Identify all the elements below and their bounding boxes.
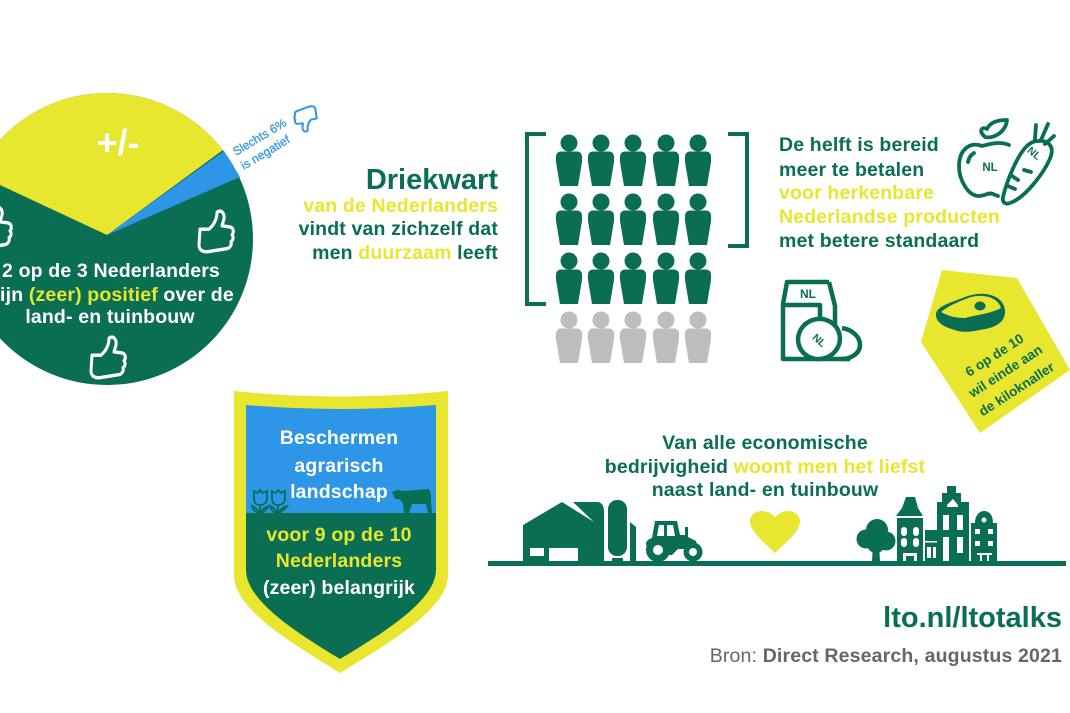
bracket left (527, 134, 546, 304)
text block: van alle economische: bedrijvigheid woont men het liefst (605, 456, 926, 478)
icon: steak (936, 294, 1005, 332)
text block: de helft: De helft is bereid (779, 134, 939, 156)
shield sky (246, 405, 436, 513)
panel: pie chart (0, 93, 320, 385)
shield text (263, 427, 415, 599)
text block: driekwart: men duurzaam leeft (312, 242, 498, 264)
icon: thumb up bottom (91, 337, 125, 378)
text block: driekwart: van de Nederlanders (303, 195, 498, 217)
text block: driekwart: Driekwart (366, 164, 498, 196)
icon: farm (523, 500, 636, 561)
shield text: landschap (290, 481, 388, 503)
pie: neutral segment (0, 93, 223, 235)
link: lto.nl/ltotalks: lto.nl/ltotalks (883, 602, 1062, 634)
text block: de helft: voor herkenbare (779, 182, 934, 204)
icon: heart (750, 511, 800, 553)
pie: positive segment (0, 93, 253, 385)
shield text: Beschermen (280, 427, 398, 449)
icon: tractor (646, 521, 702, 562)
icon: thumb up left (0, 207, 11, 248)
text block: de helft: met betere standaard (779, 230, 979, 252)
icon: apple and carrot (959, 120, 1054, 204)
tag text (963, 331, 1058, 419)
text block: van alle economische: naast land- en tuinbouw (652, 479, 879, 501)
pie: negative segment (107, 151, 240, 235)
shield field (246, 513, 436, 659)
panel: kiloknaller tag (921, 270, 1070, 433)
tag text: wil einde aan (965, 342, 1045, 401)
ground line (488, 561, 1066, 566)
icon: milk and egg: NL (810, 332, 829, 350)
tag text: 6 op de 10 (963, 331, 1027, 380)
text block: de helft (779, 134, 1000, 252)
negative label: is negatief (238, 132, 293, 173)
tag shape (921, 270, 1070, 433)
shield outer (234, 391, 448, 673)
text block: van alle economische (605, 432, 926, 501)
bracket right (728, 134, 747, 246)
icon: milk and egg: NL (800, 287, 816, 301)
icon: milk and egg (783, 282, 860, 364)
icon: tree (856, 519, 896, 561)
text block: de helft: meer te betalen (779, 159, 924, 181)
icon: cow (392, 489, 432, 513)
shield text: agrarisch (294, 455, 384, 477)
shield text: voor 9 op de 10 (266, 524, 412, 546)
icon: tulips (252, 490, 287, 513)
source: Bron: Direct Research, augustus 2021 (710, 645, 1062, 667)
tag text: de kiloknaller (976, 359, 1058, 419)
negative label: Slechts 6% (230, 115, 289, 159)
icon: apple and carrot: NL (982, 162, 998, 174)
shield text: Nederlanders (276, 550, 402, 572)
icon: thumb up right (199, 211, 233, 252)
panel: shield (234, 391, 448, 673)
icon: town (896, 486, 997, 561)
pie label: neutral: +/- (96, 122, 140, 163)
pictogram: green people (556, 134, 711, 304)
text block: driekwart: vindt van zichzelf dat (299, 218, 498, 240)
text block: driekwart (299, 164, 498, 264)
text block: van alle economische: Van alle economische (662, 432, 868, 454)
shield text: (zeer) belangrijk (263, 577, 415, 599)
icon: thumb down (292, 105, 320, 133)
pie text: 2 op de 3 Nederlanders (2, 260, 220, 282)
icon: apple and carrot: NL (1025, 145, 1044, 163)
pictogram: grey people (556, 312, 711, 363)
text block: de helft: Nederlandse producten (779, 206, 1000, 228)
pie text: land- en tuinbouw (25, 306, 195, 328)
